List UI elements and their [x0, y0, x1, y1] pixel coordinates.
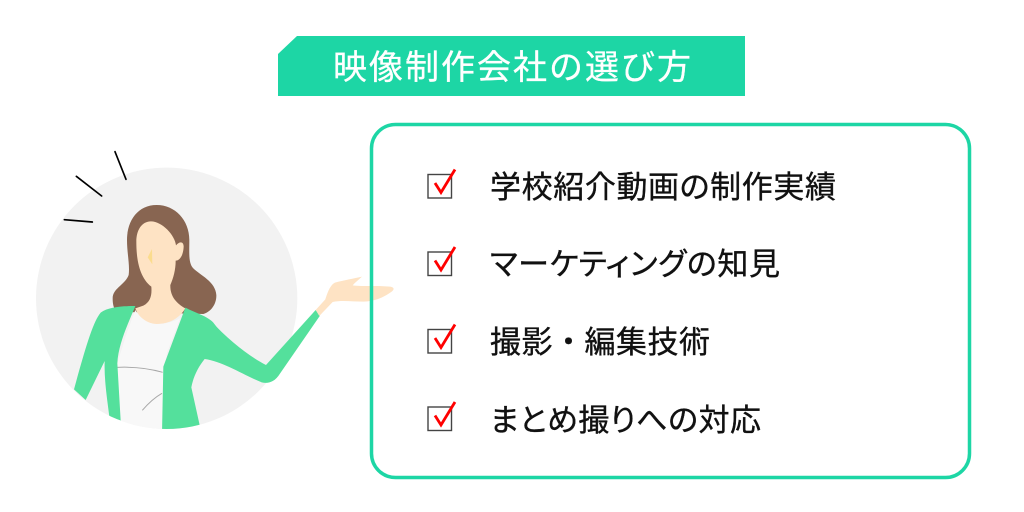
sleeve — [197, 310, 320, 383]
checkbox 2 — [428, 247, 455, 276]
item text 3: 撮影・編集技術 — [490, 325, 710, 360]
item text 2: マーケティングの知見 — [490, 247, 780, 282]
face and neck — [135, 221, 185, 324]
checklist item 1 — [428, 170, 836, 205]
white shirt — [134, 310, 162, 324]
emphasis lines — [64, 152, 126, 222]
right cardigan body — [162, 308, 218, 429]
checklist panel — [372, 124, 970, 478]
checklist item 4 — [428, 402, 761, 438]
left cardigan panel — [74, 306, 135, 421]
checkbox 3 — [428, 324, 455, 353]
shirt fold lines — [117, 367, 163, 410]
item text 1: 学校紹介動画の制作実績 — [490, 170, 836, 205]
hand — [316, 277, 394, 316]
title banner — [278, 36, 745, 96]
clothing clipped to circle — [74, 306, 218, 429]
checkbox 4 — [428, 402, 455, 430]
item text 4: まとめ撮りへの対応 — [490, 403, 761, 438]
checklist item 3 — [428, 324, 710, 360]
checklist item 2 — [428, 247, 780, 282]
title text: 映像制作会社の選び方 — [333, 49, 693, 87]
checkbox 1 — [428, 170, 455, 198]
hair — [113, 205, 216, 314]
nose shadow — [148, 249, 152, 264]
illustration: woman gesturing — [36, 152, 394, 433]
background circle — [36, 168, 297, 429]
